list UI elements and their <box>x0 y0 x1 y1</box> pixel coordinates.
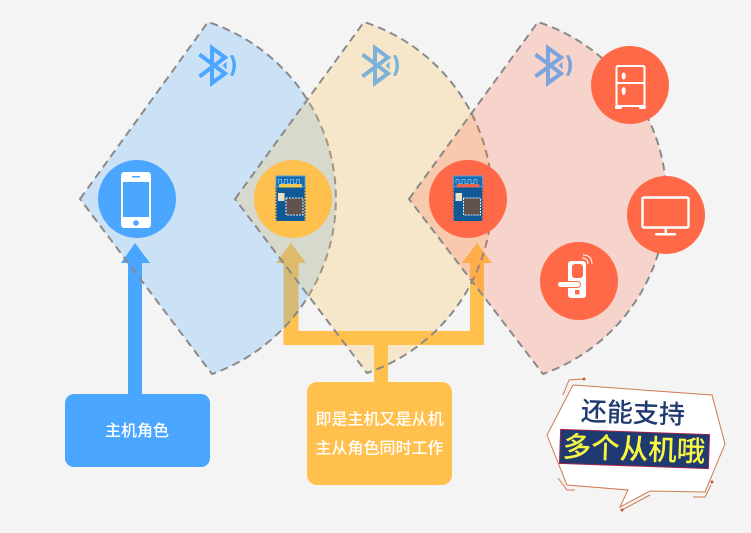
callout: supports multiple slaves <box>547 378 725 512</box>
box: master role: 主机角色 <box>105 422 169 440</box>
icon: phone circle <box>98 160 176 238</box>
icon: television <box>627 176 705 254</box>
box: master and slave <box>307 382 452 485</box>
callout: supports multiple slaves: 多个从机哦 <box>562 432 706 468</box>
arrow: master role <box>121 243 150 394</box>
arrow: dual role branches <box>276 243 492 382</box>
icon: module on yellow circle <box>254 160 332 238</box>
box: master role <box>65 394 210 467</box>
sector: master range (blue) <box>80 22 336 374</box>
icon: fridge <box>591 46 669 124</box>
icon: bluetooth blue <box>200 48 236 83</box>
icon: smart lock <box>540 242 618 320</box>
sector: master and slave range (yellow) <box>235 22 492 373</box>
icon: bluetooth right <box>536 48 572 83</box>
sector: slave range (red) <box>409 22 666 374</box>
box: master and slave: 主从角色同时工作 <box>315 440 444 458</box>
icon: bluetooth middle <box>362 48 399 83</box>
icon: module on red circle <box>429 160 507 238</box>
callout: supports multiple slaves: 还能支持 <box>580 396 685 430</box>
box: master and slave: 即是主机又是从机 <box>315 410 444 428</box>
